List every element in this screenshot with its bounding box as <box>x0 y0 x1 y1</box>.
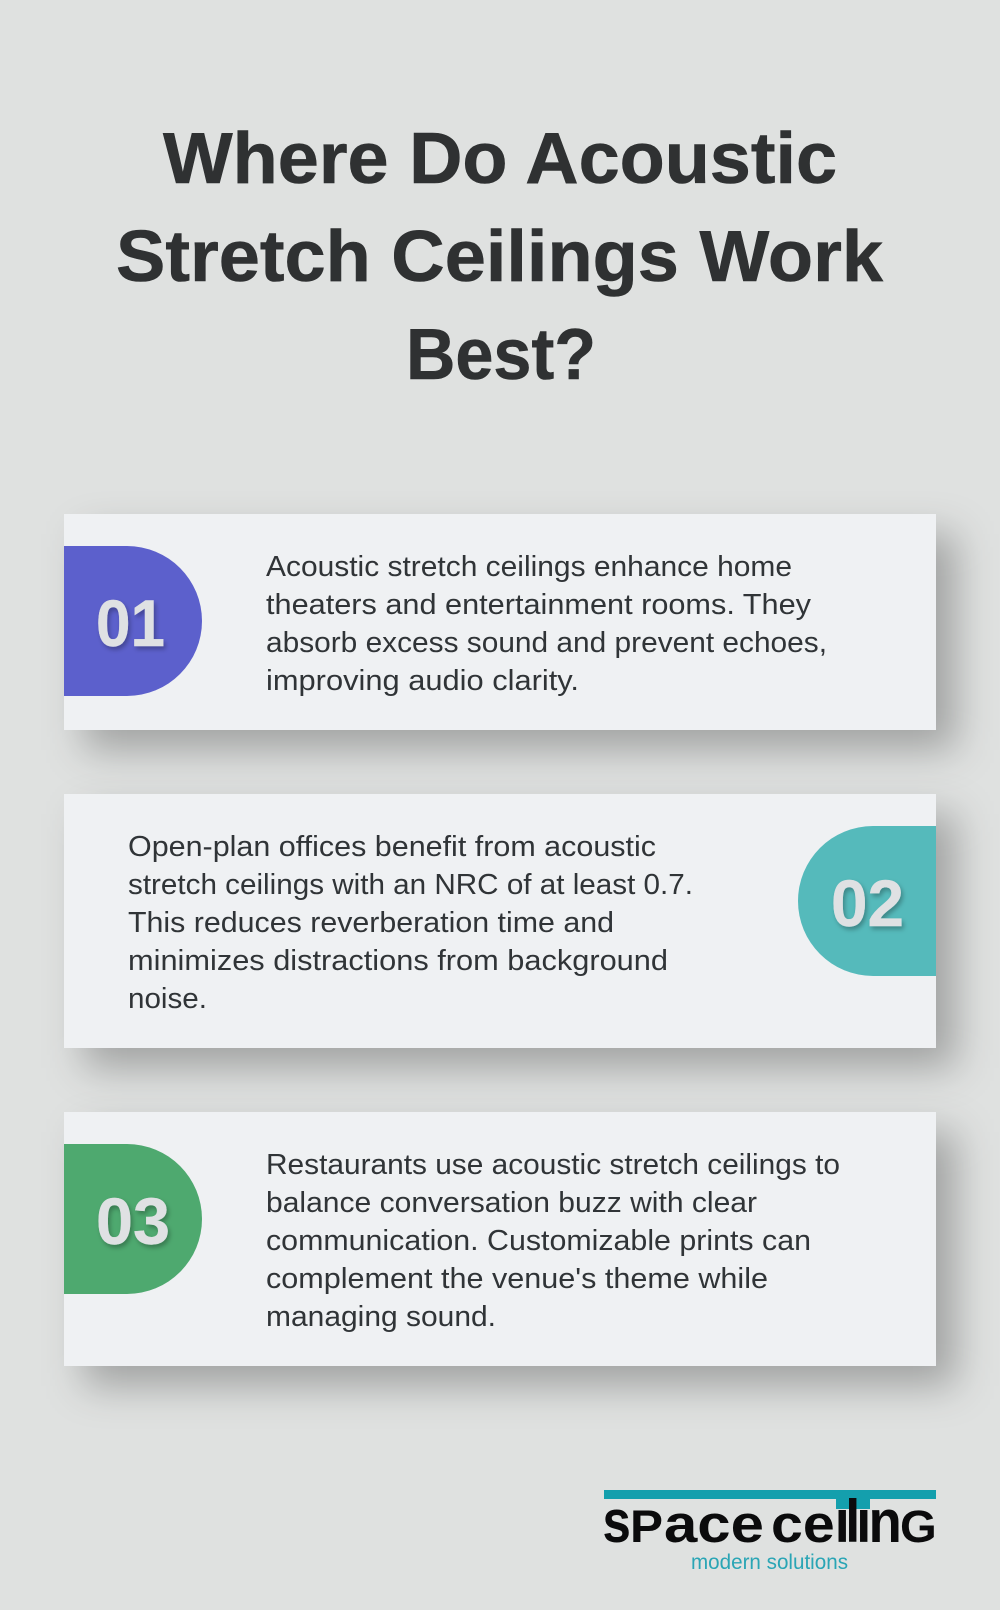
text: card 2 body: stretch ceilings with an NRC of at least 0.7. <box>128 869 693 901</box>
title: Best? <box>406 315 596 395</box>
text: card 1 body <box>266 551 827 697</box>
text: card 3 body: Restaurants use acoustic stretch ceilings to <box>266 1149 840 1181</box>
badge 01 <box>64 546 202 696</box>
text: card 1 body: improving audio clarity. <box>266 665 579 697</box>
logo: space ceiling: ace <box>664 1494 764 1553</box>
logo: space ceiling: i <box>835 1488 850 1556</box>
badge 02: 02 <box>831 866 904 940</box>
text: card 3 body: managing sound. <box>266 1301 496 1333</box>
logo: space ceiling: G <box>900 1501 937 1552</box>
text: card 2 body: Open-plan offices benefit from acoustic <box>128 831 656 863</box>
title <box>116 119 884 395</box>
badge 03 <box>64 1144 202 1294</box>
logo: space ceiling: n <box>868 1489 902 1556</box>
badge 01: 01 <box>96 586 165 660</box>
text: card 1 body: Acoustic stretch ceilings enhance home <box>266 551 792 583</box>
badge 03: 03 <box>96 1184 170 1258</box>
logo: space ceiling: i <box>856 1488 871 1556</box>
panel: card 3 restaurants <box>64 1112 956 1386</box>
text: card 3 body <box>266 1149 840 1333</box>
text: card 3 body: communication. Customizable prints can <box>266 1225 811 1257</box>
text: card 1 body: theaters and entertainment rooms. They <box>266 589 812 621</box>
text: card 2 body: minimizes distractions from background <box>128 945 668 977</box>
text: card 2 body: noise. <box>128 983 207 1015</box>
logo: space ceiling: l <box>845 1488 860 1556</box>
logo: space ceiling: s <box>602 1488 631 1555</box>
text: card 2 body <box>128 831 693 1015</box>
logo: space ceiling: P <box>630 1502 663 1552</box>
logo: space ceiling: modern solutions <box>691 1551 848 1574</box>
logo: space ceiling: ce <box>771 1494 835 1554</box>
text: card 3 body: complement the venue's theme while <box>266 1263 768 1295</box>
panel: card 1 home theaters <box>64 514 956 750</box>
title: Stretch Ceilings Work <box>116 217 884 297</box>
text: card 1 body: absorb excess sound and prevent echoes, <box>266 627 827 659</box>
panel: card 2 open-plan offices <box>64 794 956 1068</box>
text: card 2 body: This reduces reverberation time and <box>128 907 614 939</box>
text: card 3 body: balance conversation buzz with clear <box>266 1187 758 1219</box>
logo: space ceiling <box>602 1488 937 1574</box>
badge 02 <box>798 826 936 976</box>
title: Where Do Acoustic <box>163 119 837 199</box>
